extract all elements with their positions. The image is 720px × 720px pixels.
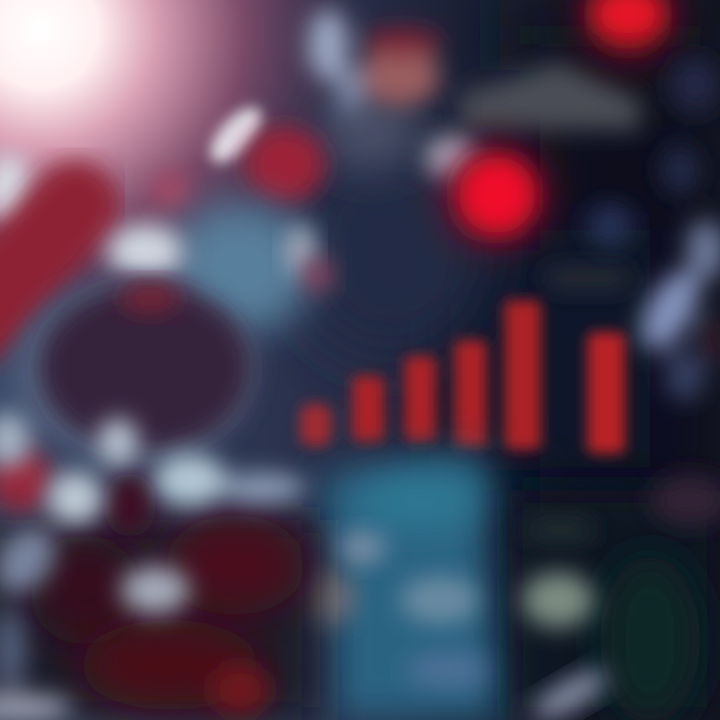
bar 4	[454, 340, 487, 448]
slate patch centre	[320, 90, 420, 170]
bar chart	[300, 300, 625, 454]
light blue sphere	[107, 202, 332, 334]
red circle and white streak	[152, 99, 325, 208]
dark right column	[430, 0, 720, 520]
light glow top-left	[0, 0, 520, 420]
bar 1	[300, 404, 331, 446]
maroon cluster bottom-left	[0, 448, 320, 720]
red dot top-right	[582, 0, 674, 60]
bar 3	[404, 356, 436, 442]
white blobs row	[0, 412, 306, 720]
pale left edge	[0, 154, 32, 226]
pink figure top-center	[308, 9, 442, 114]
bar 2	[352, 376, 384, 442]
bar 6	[587, 332, 625, 454]
dark green lower right	[510, 474, 720, 720]
mid navy panel	[290, 140, 490, 360]
bar 5	[504, 300, 541, 450]
bright red circle	[426, 136, 545, 245]
dark maroon sphere	[15, 278, 255, 462]
pale blue shapes right	[586, 57, 720, 401]
red capsule left	[0, 205, 75, 320]
gray band top-right	[460, 62, 640, 288]
teal lower panel	[297, 450, 510, 720]
